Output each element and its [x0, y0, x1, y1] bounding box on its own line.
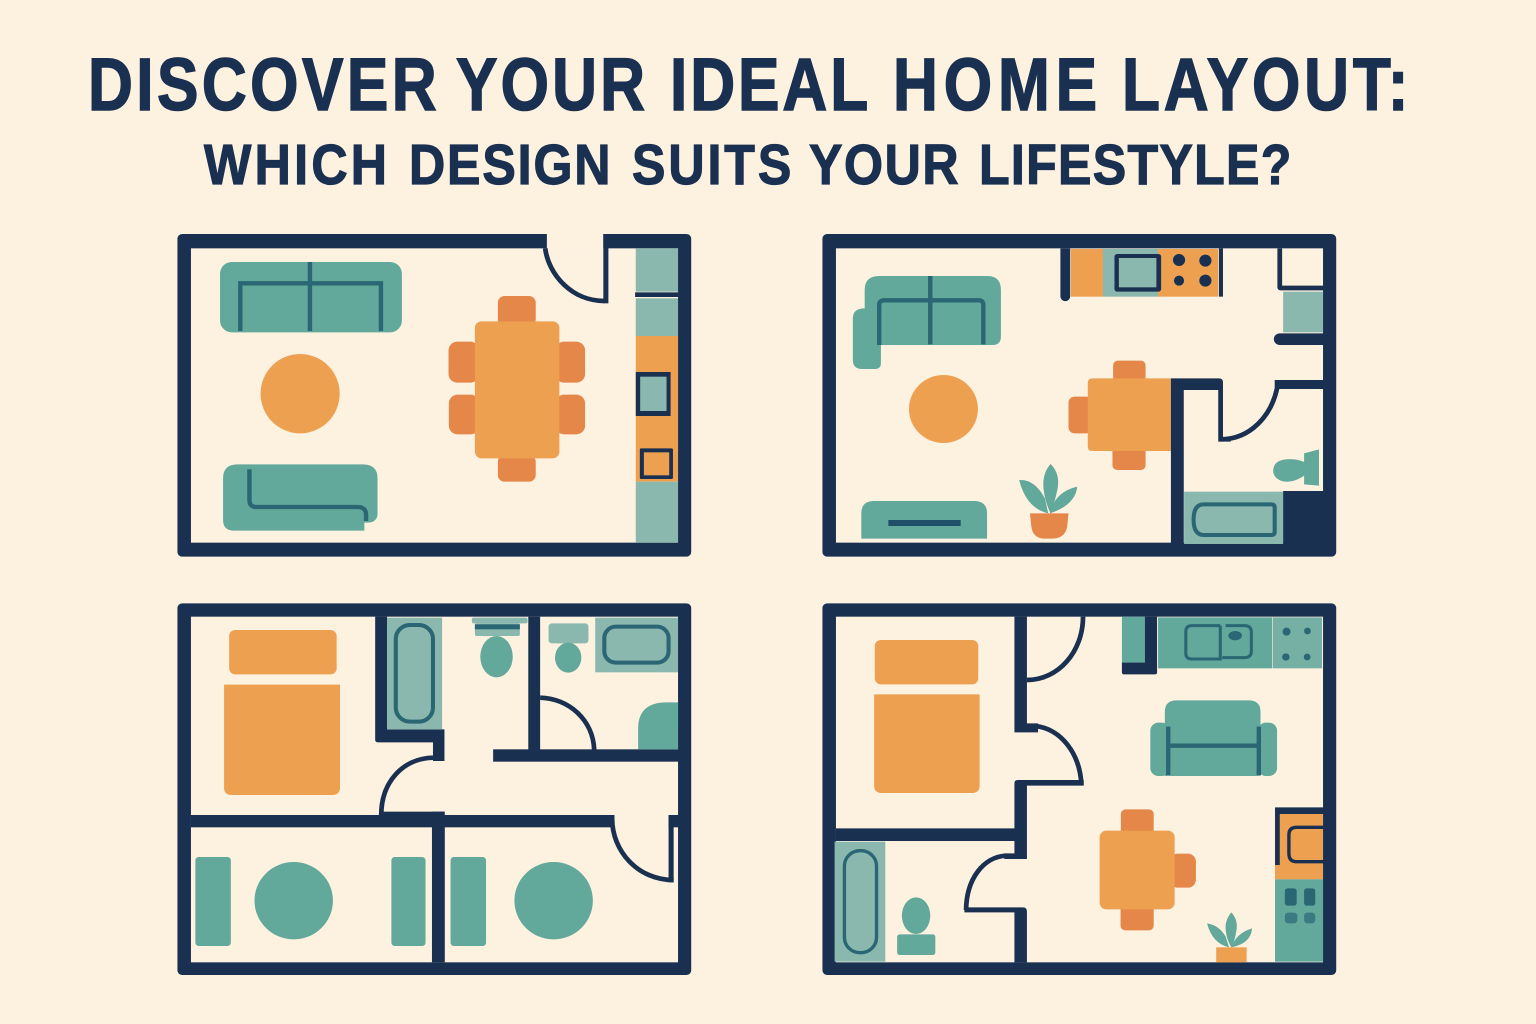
- subtitle: YOUR: [809, 133, 959, 197]
- round coffee table: [909, 375, 978, 443]
- title: DISCOVER: [88, 44, 437, 126]
- panel: one-bedroom layout: [822, 603, 1336, 975]
- bedroom three furniture: [451, 857, 593, 946]
- outer walls: [177, 232, 691, 557]
- double bed: [874, 640, 980, 793]
- title: HOME: [893, 44, 1097, 126]
- armchair sofa: [1150, 700, 1277, 776]
- subtitle: LIFESTYLE?: [979, 133, 1291, 197]
- bathtub: [1184, 491, 1325, 546]
- outer walls and partitions: [177, 603, 691, 975]
- kitchen appliances right wall: [1275, 807, 1324, 962]
- double bed: [224, 630, 340, 795]
- sofa bottom: [861, 501, 987, 539]
- bathroom walls and door: [1171, 378, 1324, 543]
- kitchen counter with sink and burners: [1060, 248, 1223, 301]
- toilet one: [472, 618, 528, 677]
- bathtub: [835, 842, 885, 962]
- title: [88, 44, 1408, 126]
- door swing arcs: [966, 617, 1083, 910]
- panel: studio layout with kitchen and bathroom: [822, 234, 1336, 557]
- door swing arcs: [381, 698, 674, 880]
- toilet: [897, 897, 935, 955]
- bedroom two furniture: [195, 857, 426, 946]
- kitchen counter: [1122, 617, 1322, 674]
- subtitle: [204, 133, 1291, 197]
- bathtub one: [387, 618, 442, 729]
- subtitle: DESIGN: [409, 133, 611, 197]
- round coffee table: [261, 354, 340, 433]
- subtitle: WHICH: [204, 133, 387, 197]
- panel: open-plan living and dining layout: [177, 232, 691, 557]
- plant: [1207, 912, 1252, 962]
- entry door with swing arc: [545, 234, 608, 303]
- dining table with chairs: [1069, 361, 1171, 470]
- title: IDEAL: [670, 44, 868, 126]
- title: LAYOUT:: [1122, 44, 1408, 126]
- corner sofa: [853, 276, 1001, 369]
- sink cabinet: [638, 702, 678, 749]
- title: YOUR: [456, 44, 645, 126]
- outer walls and partitions: [822, 603, 1336, 975]
- bathtub two: [595, 618, 678, 672]
- dining table with six chairs: [449, 296, 585, 482]
- outer walls: [822, 234, 1336, 557]
- toilet: [1273, 449, 1319, 486]
- panel: three-bedroom layout: [177, 603, 691, 975]
- sofa top: [220, 262, 402, 332]
- sofa bottom: [223, 464, 378, 531]
- plant: [1019, 464, 1077, 539]
- kitchen counter strip: [635, 248, 678, 543]
- dining table with chairs: [1100, 809, 1196, 930]
- toilet two: [549, 623, 588, 673]
- subtitle: SUITS: [632, 133, 791, 197]
- closet and counter top right: [1274, 248, 1324, 345]
